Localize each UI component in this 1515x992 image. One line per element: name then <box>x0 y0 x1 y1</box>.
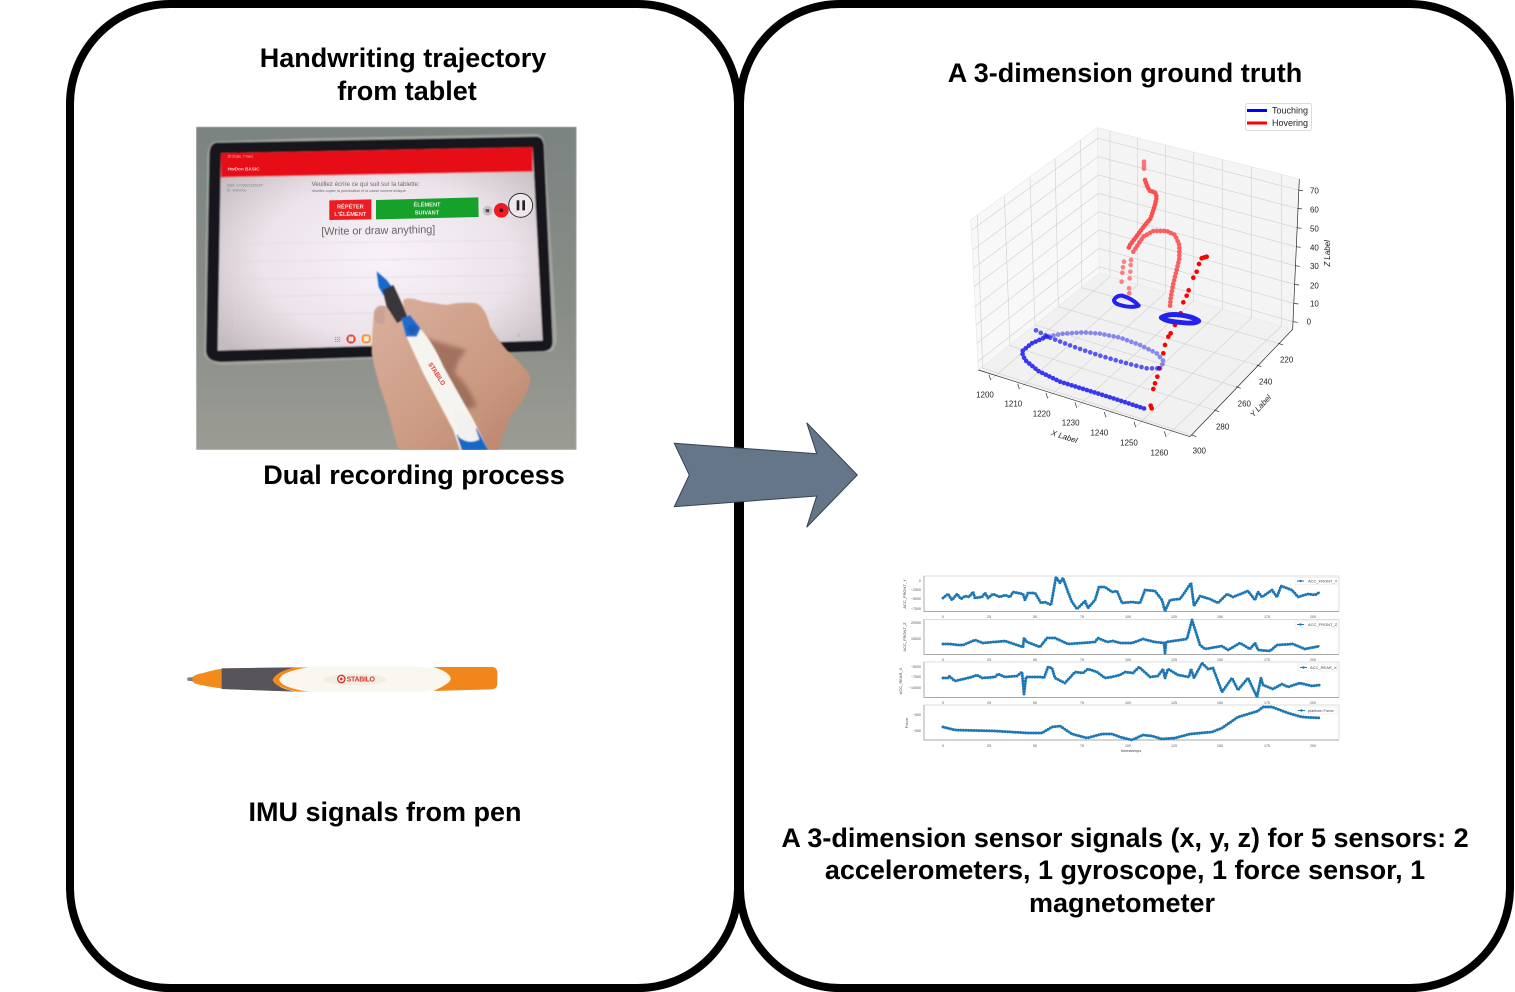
subplot: ACC_FRONT_Z: 100 <box>1125 658 1131 662</box>
x axis labels: 1200 <box>976 391 994 400</box>
caption: sensor signal description: A 3-dimension sensor signals (x, y, z) for 5 sensors: 2 <box>781 823 1469 853</box>
y axis labels: 300 <box>1193 447 1207 456</box>
caption: IMU signals from pen: IMU signals from pen <box>248 797 522 827</box>
subplot: ACC_FRONT_Z: 50 <box>1033 658 1037 662</box>
subplot: force: 125 <box>1171 744 1177 748</box>
subplot: force: −500 <box>913 713 921 717</box>
photo: hand writing on tablet with pen: Start: 1709821625157 <box>227 183 263 187</box>
subplot: ACC_FRONT_Y: −7500 <box>911 607 921 611</box>
3D panes <box>971 128 1299 437</box>
photo: hand writing on tablet with pen: Veuillez écrire ce qui suit sur la tablette: <box>312 181 420 188</box>
subplot: ACC_FRONT_Y: ACC_FRONT_Y <box>1308 578 1338 584</box>
y axis labels: 260 <box>1238 399 1252 408</box>
button: repeat element <box>329 199 371 220</box>
x axis labels: 1230 <box>1062 419 1080 428</box>
subplot: ACC_REAR_X: 75 <box>1080 701 1084 705</box>
y axis labels <box>1193 356 1294 456</box>
subplot: ACC_REAR_X: −5000 <box>911 665 921 669</box>
bottom app icons <box>335 332 521 344</box>
subplot: ACC_FRONT_Z: 25 <box>987 658 991 662</box>
photo: hand writing on tablet with pen: ID: WH000e <box>227 189 247 193</box>
caption: sensor signal description <box>781 823 1469 918</box>
subplot: ACC_FRONT_Z: 125 <box>1171 658 1177 662</box>
button: next element: ÉLÉMENT <box>413 201 441 209</box>
x axis labels: X Label <box>1049 428 1079 445</box>
tablet screen <box>218 147 543 351</box>
pen held in hand <box>405 328 488 450</box>
photo: hand writing on tablet with pen: STABILO <box>426 362 446 387</box>
z axis labels: 40 <box>1310 244 1319 253</box>
legend: touching and hovering <box>1246 104 1312 130</box>
touching strokes: large loop <box>1022 330 1164 409</box>
subplot: ACC_REAR_X: ACC_REAR_X <box>898 667 903 694</box>
subplot: ACC_FRONT_Y: ACC_FRONT_Y <box>902 579 907 609</box>
heading: handwriting trajectory from tablet <box>260 43 546 106</box>
subplot: force <box>904 705 1339 753</box>
x axis labels: 1210 <box>1004 400 1023 409</box>
subplot: ACC_REAR_X: 125 <box>1171 701 1177 705</box>
subplot: ACC_FRONT_Z: 0 <box>942 658 944 662</box>
z axis labels: 10 <box>1310 300 1319 309</box>
subplot: force: 200 <box>1310 744 1316 748</box>
subplot: ACC_FRONT_Y: 200 <box>1310 615 1316 619</box>
subplot: ACC_REAR_X: 150 <box>1217 701 1223 705</box>
subplot: force: 0 <box>942 744 944 748</box>
heading: 3-dimension ground truth: A 3-dimension ground truth <box>948 58 1302 88</box>
image: IMU sensor pen: STABILO <box>347 677 376 684</box>
subplot: ACC_REAR_X: 175 <box>1264 701 1270 705</box>
panel: right outputs <box>740 4 1510 988</box>
axis edges and ticks <box>978 179 1303 437</box>
subplot: ACC_FRONT_Y: 0 <box>919 579 921 583</box>
caption: sensor signal description: magnetometer <box>1029 888 1216 918</box>
subplot: ACC_FRONT_Y: −2500 <box>911 588 921 592</box>
y axis labels: 240 <box>1259 377 1273 386</box>
z axis labels: 30 <box>1310 262 1319 271</box>
button: repeat element: L'ÉLÉMENT <box>334 210 367 218</box>
subplot: ACC_FRONT_Z: 75 <box>1080 658 1084 662</box>
subplot: ACC_FRONT_Z: ACC_FRONT_Z <box>902 622 907 652</box>
subplot: ACC_FRONT_Z: ACC_FRONT_Z <box>1308 622 1338 627</box>
z axis labels: 0 <box>1307 317 1312 326</box>
subplot: ACC_FRONT_Y: 150 <box>1217 615 1223 619</box>
button: next element: SUIVANT <box>415 210 440 216</box>
photo: hand writing on tablet with pen: Veuillez copier la ponctuation et la casse comme indiqué <box>312 189 406 193</box>
z axis labels: 50 <box>1310 225 1319 234</box>
subplot: ACC_REAR_X: −7500 <box>911 675 921 679</box>
photo: hand writing on tablet with pen: HwDon BASIC <box>228 167 260 172</box>
subplot: force: 25 <box>987 744 991 748</box>
subplot: force: −550 <box>913 729 921 733</box>
chart: 3D trajectory scatter plot <box>971 128 1332 458</box>
subplot: ACC_FRONT_Y: 25 <box>987 615 991 619</box>
image: IMU sensor pen <box>187 667 497 692</box>
z axis labels <box>1307 187 1332 326</box>
photo: hand writing on tablet with pen: 15:10 jeu. 7 mars <box>227 154 253 158</box>
z axis labels: 70 <box>1310 187 1319 196</box>
subplot: force: Force <box>904 717 909 728</box>
x axis labels: 1250 <box>1120 439 1138 448</box>
subplot: ACC_REAR_X: 0 <box>942 701 944 705</box>
subplot: ACC_FRONT_Z: 200 <box>1310 658 1316 662</box>
shadow between fingers <box>428 337 478 410</box>
subplot: ACC_FRONT_Z: 15000 <box>911 637 921 641</box>
subplot: force: 150 <box>1217 744 1223 748</box>
legend: touching and hovering: Touching <box>1272 106 1308 116</box>
subplot: ACC_FRONT_Y: 125 <box>1171 615 1177 619</box>
x axis labels <box>976 391 1169 458</box>
subplot: ACC_FRONT_Y <box>902 576 1339 619</box>
subplot: force: timestamps <box>1121 748 1141 753</box>
panel: left recording process <box>70 4 738 988</box>
subplot: force: 175 <box>1264 744 1270 748</box>
subplot: ACC_FRONT_Y: 50 <box>1033 615 1037 619</box>
arrow: from recording to outputs <box>674 423 857 527</box>
chart: IMU sensor time series <box>898 576 1339 753</box>
tablet case <box>204 134 557 365</box>
subplot: ACC_FRONT_Y: 0 <box>942 615 944 619</box>
subplot: ACC_REAR_X: 25 <box>987 701 991 705</box>
caption: dual recording process: Dual recording process <box>263 460 565 490</box>
subplot: ACC_REAR_X: 50 <box>1033 701 1037 705</box>
subplot: ACC_REAR_X: −10000 <box>909 686 921 690</box>
subplot: ACC_REAR_X: 100 <box>1125 701 1131 705</box>
y axis labels: 280 <box>1216 422 1230 431</box>
legend: touching and hovering: Hovering <box>1272 118 1308 128</box>
hovering trajectory, front section <box>1151 257 1207 408</box>
heading: handwriting trajectory from tablet: Handwriting trajectory <box>260 43 546 73</box>
subplot: force: 50 <box>1033 744 1037 748</box>
z axis labels: 60 <box>1310 205 1319 214</box>
subplot: force: 75 <box>1080 744 1084 748</box>
subplot: force: 100 <box>1125 744 1131 748</box>
subplot: force: platform Force <box>1308 708 1335 713</box>
caption: sensor signal description: accelerometers, 1 gyroscope, 1 force sensor, 1 <box>825 855 1425 885</box>
subplot: ACC_REAR_X: 200 <box>1310 701 1316 705</box>
button: next element <box>376 197 479 219</box>
x axis labels: 1220 <box>1033 409 1051 418</box>
subplot: ACC_FRONT_Y: −5000 <box>911 597 921 601</box>
x axis labels: 1260 <box>1150 449 1169 458</box>
x axis labels: 1240 <box>1090 429 1109 438</box>
photo: hand writing on tablet with pen <box>196 127 577 450</box>
red app bar <box>221 147 533 177</box>
heading: handwriting trajectory from tablet: from tablet <box>337 76 477 106</box>
y axis labels: 220 <box>1280 356 1294 365</box>
z axis labels: 20 <box>1310 281 1319 290</box>
subplot: ACC_REAR_X: ACC_REAR_X <box>1310 665 1337 670</box>
subplot: ACC_FRONT_Z <box>902 620 1339 662</box>
subplot: ACC_FRONT_Y: 75 <box>1080 615 1084 619</box>
subplot: ACC_FRONT_Y: 100 <box>1125 615 1131 619</box>
subplot: ACC_FRONT_Z: 20000 <box>911 621 921 625</box>
hand <box>372 298 531 450</box>
photo: hand writing on tablet with pen: [Write or draw anything] <box>321 224 435 238</box>
subplot: ACC_FRONT_Y: 175 <box>1264 615 1270 619</box>
z axis labels: Z Label <box>1323 240 1332 268</box>
subplot: ACC_FRONT_Z: 175 <box>1264 658 1270 662</box>
subplot: ACC_FRONT_Z: 150 <box>1217 658 1223 662</box>
subplot: ACC_REAR_X <box>898 662 1339 705</box>
y axis labels: Y Label <box>1248 393 1273 419</box>
record and pause controls <box>483 193 533 218</box>
button: repeat element: RÉPÉTER <box>337 202 364 210</box>
hovering trajectory, faded back section <box>1122 162 1179 307</box>
touching strokes: small loops <box>1114 296 1199 323</box>
